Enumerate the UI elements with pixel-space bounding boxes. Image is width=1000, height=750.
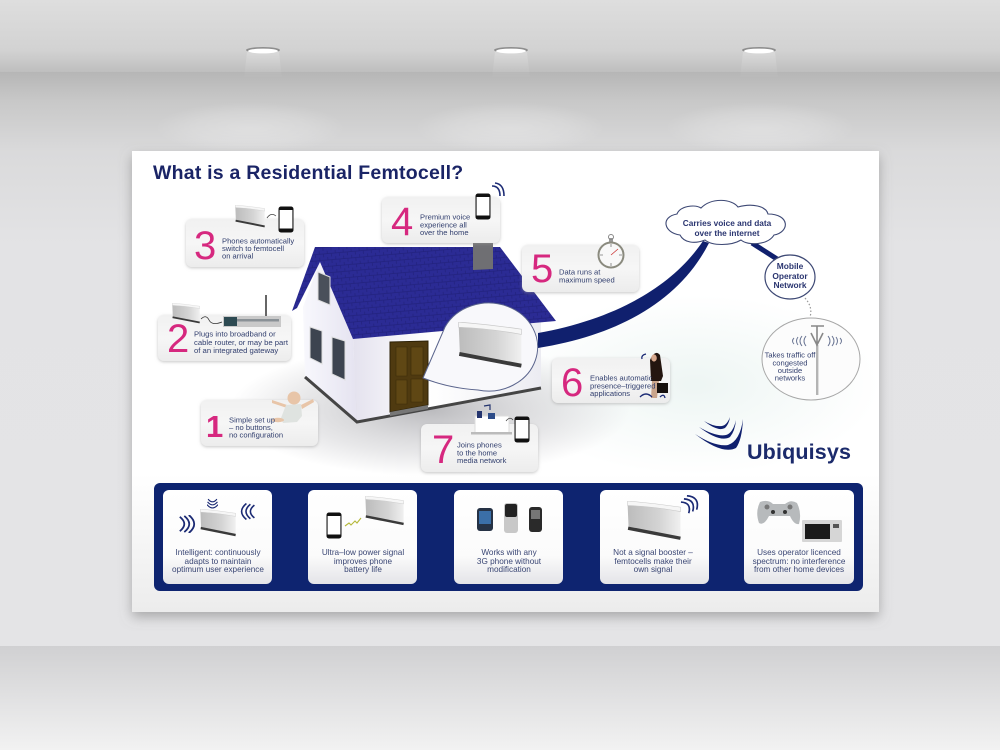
benefit card: licensed spectrum: Uses operator licenced — [757, 548, 841, 557]
card 7 — [421, 405, 538, 472]
icon: femtocell and phone — [235, 205, 294, 232]
house wall right — [353, 320, 541, 422]
ceiling lamp right — [740, 47, 778, 78]
card 3 — [186, 205, 304, 268]
benefit card: intelligent: optimum user experience — [172, 565, 264, 574]
cloud: internet — [666, 200, 785, 244]
text: card 7: to the home — [457, 448, 497, 458]
logo: Ubiquisys — [695, 417, 851, 464]
magnifier callout — [423, 303, 538, 391]
benefit card: low power: improves phone — [334, 557, 393, 566]
card 3: 3 — [194, 224, 216, 268]
text: card 4: over the home — [420, 228, 469, 237]
text: tower: outside — [778, 366, 802, 375]
dotted link to tower — [805, 298, 811, 317]
card 2: 2 — [167, 317, 189, 361]
card 6: 6 — [561, 361, 583, 405]
card 6 — [552, 353, 670, 405]
icon: three phones — [477, 503, 542, 533]
icon: business woman — [640, 353, 668, 398]
card 7: 7 — [432, 428, 454, 472]
bubble: mobile operator network — [765, 255, 815, 299]
cloud: internet: Carries voice and data — [683, 218, 772, 228]
icon: game controller and microwave — [757, 501, 842, 542]
text: card 2: of an integrated gateway — [194, 346, 278, 355]
bubble: mobile operator network: Network — [773, 280, 807, 290]
text: card 4: Premium voice — [420, 212, 470, 222]
title: What is a Residential Femtocell? — [153, 162, 463, 184]
bubble: mobile operator network: Operator — [772, 271, 808, 281]
panel: key benefits — [154, 483, 863, 591]
benefit card: intelligent: Intelligent: continuously — [175, 548, 261, 557]
bubble: tower — [762, 318, 860, 400]
benefit card: intelligent — [163, 490, 272, 584]
house — [292, 243, 556, 422]
text: card 3: Phones automatically — [222, 236, 294, 246]
text: card 3: on arrival — [222, 252, 254, 260]
icon: femtocell and router — [172, 295, 281, 327]
ceiling lamp centre — [492, 47, 530, 78]
card 1: 1 — [206, 409, 223, 444]
card 4: 4 — [391, 200, 413, 244]
card 5 — [522, 234, 639, 292]
poster board — [132, 151, 880, 612]
text: card 7: Joins phones — [457, 440, 502, 450]
cloud: internet: over the internet — [694, 228, 760, 238]
text: card 5: maximum speed — [559, 276, 615, 284]
card 1 — [201, 392, 318, 446]
floor — [0, 646, 1000, 750]
benefit card: not a booster: Not a signal booster – — [613, 548, 693, 557]
window left — [310, 327, 322, 364]
text: card 4: experience all — [420, 220, 467, 230]
benefit card: any phone: modification — [487, 565, 531, 574]
icon: phone and femtocell — [326, 496, 404, 538]
icon: antenna tower — [792, 326, 842, 395]
benefit card: any phone: Works with any — [481, 548, 538, 557]
benefit card: licensed spectrum: spectrum: no interference — [753, 557, 846, 566]
connector cloud to operator — [752, 243, 777, 259]
window upper — [318, 272, 330, 305]
card 5: 5 — [531, 247, 553, 291]
text: card 3: switch to femtocell — [222, 244, 284, 253]
benefit card: not a booster: own signal — [634, 565, 673, 574]
card 4 — [382, 183, 504, 244]
benefit card: not a booster: femtocells make their — [614, 557, 692, 566]
text: tower: Takes traffic off — [765, 350, 816, 360]
house chimney — [473, 243, 493, 270]
text: card 5: Data runs at — [559, 268, 601, 276]
text: card 2: Plugs into broadband or — [194, 330, 276, 338]
benefit card: licensed spectrum: from other home devices — [754, 565, 844, 574]
benefit card: low power: Ultra–low power signal — [322, 548, 404, 557]
window right — [332, 337, 345, 380]
benefit card: any phone — [454, 490, 563, 584]
card 2 — [158, 295, 291, 361]
benefit card: low power — [308, 490, 417, 584]
gallery wall — [0, 72, 1000, 646]
ceiling lamp left — [244, 47, 282, 78]
icon: baby — [272, 392, 314, 423]
ceiling — [0, 0, 1000, 72]
house base — [305, 377, 541, 422]
icon: femtocell with signal — [628, 493, 701, 539]
text: card 1: no configuration — [229, 430, 283, 440]
icon: femtocell in magnifier — [459, 322, 521, 366]
logo: Ubiquisys: Ubiquisys — [747, 440, 851, 464]
benefit card: low power: battery life — [344, 565, 382, 574]
benefit card: not a booster — [600, 490, 709, 584]
benefit card: any phone: 3G phone without — [477, 557, 542, 566]
icon: phone with signal — [476, 183, 504, 220]
broadband link arc — [538, 241, 709, 348]
text: tower: congested — [772, 358, 808, 368]
icon: femtocell with signals — [180, 499, 254, 535]
text: card 2: cable router, or may be part — [194, 338, 289, 347]
text: card 6: Enables automatic — [590, 374, 653, 382]
text: card 7: media network — [457, 456, 507, 465]
text: card 6: applications — [590, 389, 630, 398]
icon: stopwatch — [598, 234, 624, 268]
house roof — [292, 247, 556, 339]
text: card 1: – no buttons, — [229, 423, 273, 432]
text: tower: networks — [775, 374, 805, 382]
icon: laptop, media and phone — [471, 405, 530, 442]
door — [390, 341, 428, 416]
benefit card: licensed spectrum — [744, 490, 854, 584]
text: card 1: Simple set up — [229, 416, 275, 424]
house wall gable — [303, 260, 357, 422]
bubble: mobile operator network: Mobile — [777, 261, 804, 271]
benefit card: intelligent: adapts to maintain — [185, 557, 252, 566]
text: card 6: presence–triggered — [590, 382, 655, 390]
